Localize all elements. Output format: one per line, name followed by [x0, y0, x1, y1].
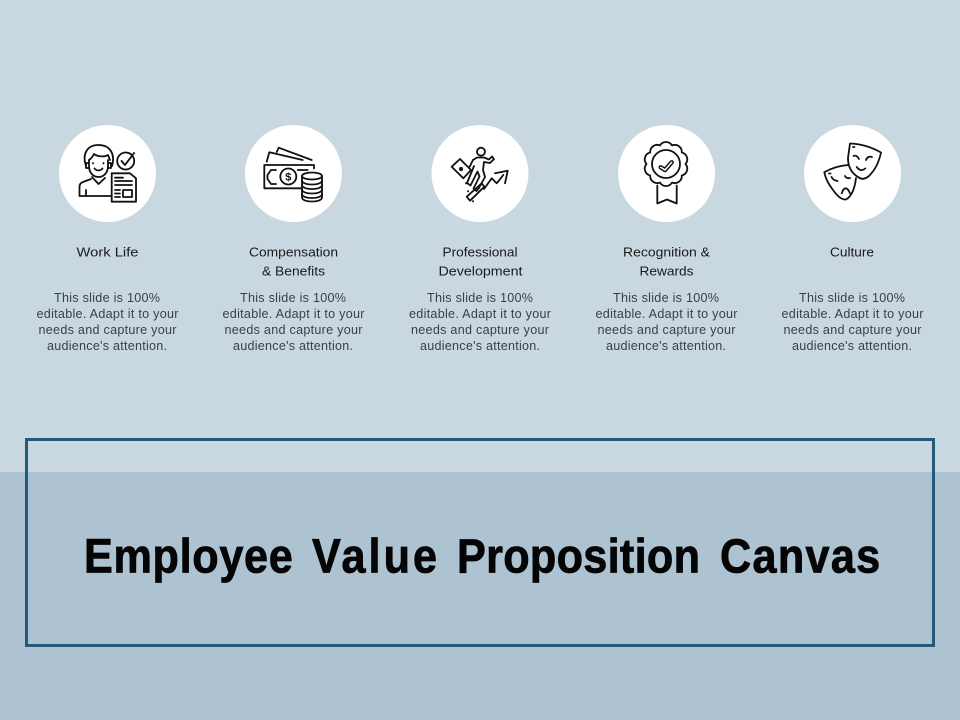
title: Canvas — [720, 529, 880, 583]
text: work life description: editable. Adapt it to your — [36, 307, 178, 321]
text: compensation description: editable. Adapt it to your — [222, 307, 364, 321]
heading: Recognition & Rewards: Recognition & — [623, 246, 711, 260]
text: compensation description: needs and capture your — [224, 323, 362, 337]
heading: Culture: Culture — [830, 246, 874, 260]
text: culture description: audience's attention. — [792, 339, 912, 353]
heading: Professional Development — [438, 246, 523, 278]
icon: theatre masks — [804, 125, 901, 222]
heading: Recognition & Rewards — [623, 246, 711, 278]
heading: Compensation & Benefits: Compensation — [249, 246, 338, 260]
text: culture description: needs and capture your — [784, 323, 922, 337]
text: compensation description: This slide is 100% — [240, 291, 346, 305]
heading: Recognition & Rewards: Rewards — [640, 264, 694, 278]
text: work life description: needs and capture your — [38, 323, 176, 337]
icon: banknotes and coins — [245, 125, 342, 222]
panel: work life — [36, 125, 178, 353]
text: work life description: This slide is 100% — [54, 291, 160, 305]
panel: professional development — [409, 125, 551, 353]
icon: rosette badge — [618, 125, 715, 222]
title: Employee — [84, 529, 293, 583]
heading: Professional Development: Professional — [442, 246, 518, 260]
text: recognition description: editable. Adapt it to your — [596, 307, 738, 321]
text: culture description: editable. Adapt it to your — [782, 307, 924, 321]
title frame — [26, 440, 934, 646]
text: work life description: audience's attention. — [47, 339, 167, 353]
text: professional development description: This slide is 100% — [427, 291, 533, 305]
panel: recognition and rewards — [596, 125, 738, 353]
icon: banknotes and coins: $ — [285, 172, 291, 184]
text: recognition description — [596, 291, 738, 353]
text: culture description: This slide is 100% — [799, 291, 905, 305]
text: professional development description: editable. Adapt it to your — [409, 307, 551, 321]
heading: Compensation & Benefits: & Benefits — [262, 264, 325, 278]
text: recognition description: needs and capture your — [598, 323, 736, 337]
panel: compensation and benefits — [222, 125, 364, 353]
panel: culture — [782, 125, 924, 353]
title: Proposition — [457, 529, 700, 583]
text: work life description — [36, 291, 178, 353]
text: compensation description: audience's attention. — [233, 339, 353, 353]
icon: employee with document — [59, 125, 156, 222]
title — [84, 529, 880, 583]
heading: Work Life: Work Life — [76, 246, 139, 260]
heading: Compensation & Benefits — [249, 246, 338, 278]
text: professional development description: needs and capture your — [411, 323, 549, 337]
text: professional development description: audience's attention. — [420, 339, 540, 353]
text: compensation description — [222, 291, 364, 353]
title: Value — [312, 529, 437, 583]
text: recognition description: audience's attention. — [606, 339, 726, 353]
text: culture description — [782, 291, 924, 353]
heading: Professional Development: Development — [438, 264, 523, 278]
icon: climbing businessperson with arrow — [432, 125, 528, 222]
text: professional development description — [409, 291, 551, 353]
text: recognition description: This slide is 100% — [613, 291, 719, 305]
